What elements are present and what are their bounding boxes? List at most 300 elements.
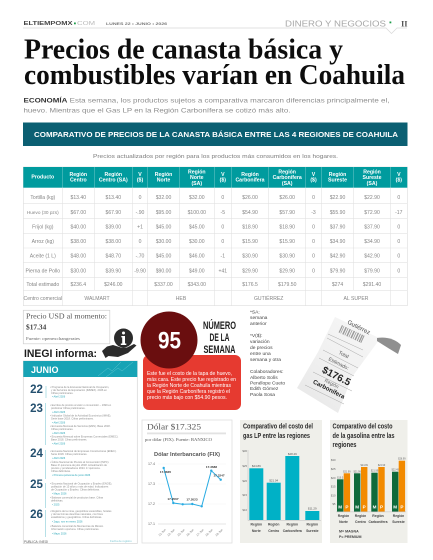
date 23: • Abril 2026 [52, 431, 66, 435]
line chart: 17.4 [148, 462, 155, 466]
red explanation box: que la Región Carbonífera registró el [147, 389, 230, 395]
line chart: 12-Jun [166, 528, 176, 537]
page header strip [23, 18, 408, 34]
bar chart: Región [268, 522, 279, 526]
notes and collaborators: semana [250, 316, 268, 321]
row: tortilla: 0 [312, 195, 315, 201]
row: huevo: $72.90 [364, 210, 380, 216]
bar chart: Norte [252, 529, 261, 533]
table header row: Centro [70, 178, 87, 184]
bar chart: Región [307, 522, 318, 526]
row: huevo: $100.00 [188, 210, 206, 216]
notes and collaborators: de precios [250, 345, 273, 351]
calendar header [23, 361, 137, 377]
row: tortilla: $32.00 [189, 195, 205, 201]
table header row: Región [363, 170, 381, 176]
panel: gas LP chart [240, 420, 322, 543]
date 23: • Indicador Global de la Actividad Económica (IMAE), [50, 414, 111, 418]
bar chart: $30 [242, 449, 247, 453]
date 23: • Escritos de precios al valor o consumidor – 1999 en [50, 403, 112, 407]
title: combustibles varían en Coahuila [24, 59, 405, 91]
line chart: 17.2067 [167, 497, 179, 501]
row: huevo: Huevo (30 pzs) [27, 210, 59, 215]
grouped bar chart: Región [393, 514, 404, 518]
row: frijol: $39.00 [106, 224, 121, 230]
date 26: • Mayo 2026 [52, 532, 67, 536]
page header strip: COM [77, 21, 96, 27]
row: tortilla: 0 [139, 195, 142, 201]
receipt illustration: Total [337, 350, 350, 360]
grouped bar chart: $25 [331, 467, 336, 471]
row: pierna de pollo [26, 268, 400, 274]
panel: USD price box: Fuente: openexchangerates [26, 337, 81, 341]
line chart: 11-Jun [158, 528, 167, 537]
date 23: • Encuesta Mensual sobre Empresas Comerciales (EMEC). [50, 434, 119, 438]
grouped bar chart: Centro [355, 520, 366, 524]
panel: gas LP chart: gas LP entre las regiones [243, 433, 310, 440]
date 22: • Abril 2026 [52, 394, 66, 398]
bar chart: $15 [242, 493, 247, 497]
grouped bar chart: M [393, 504, 397, 510]
date 23: • Abril 2026 [52, 442, 66, 446]
table header row: Región [155, 172, 172, 178]
date 24: 24 [30, 448, 43, 460]
price comparison table [23, 167, 407, 306]
grouped bar chart: M [373, 504, 377, 510]
line chart: 19-Jun [214, 528, 224, 537]
grouped bar chart: M [355, 504, 359, 510]
icon: hand holding info [102, 328, 136, 358]
table header row: Región [241, 172, 259, 178]
receipt illustration: Región [323, 378, 340, 390]
grouped bar chart: $21.99 [354, 470, 362, 473]
date 25: • Encuesta Nacional de Ocupación y Empleo (ENOE), [50, 482, 112, 486]
row: aceite: $42.90 [364, 254, 380, 260]
row: pierna de pollo: $79.90 [330, 268, 345, 274]
panel: USD price box [23, 310, 110, 344]
panel: USD price box: $17.34 [26, 322, 47, 332]
row: frijol: $18.90 [242, 224, 258, 230]
chart legend: P= PREMIUM [339, 535, 361, 539]
page header strip: LUNES 22 • JUNIO • 2026 [106, 22, 167, 26]
table header row: Norte [157, 178, 170, 184]
bar chart: $20 [242, 479, 247, 483]
row: arroz: 0 [312, 239, 315, 245]
line chart: 17-Jun [195, 528, 205, 537]
calendar footer [24, 539, 132, 544]
table header row: V [138, 172, 142, 178]
date 24: • Encuesta Nacional de Empresas Constructoras (ENEC). [50, 449, 117, 453]
row: arroz: Arroz (kg) [32, 239, 54, 245]
row: pierna de pollo: $39.90 [106, 268, 121, 274]
grouped bar chart: $19.5 [337, 476, 344, 479]
date 25: • Balanza comercial de productos base. Cifras [50, 496, 104, 500]
grouped bar chart: P [363, 504, 366, 510]
grouped bar chart: $22.49 [392, 469, 400, 472]
row: pierna de pollo: 0 [312, 268, 315, 274]
row: pierna de pollo: $49.00 [189, 268, 205, 274]
table header row: ($) [137, 178, 143, 184]
panel: dólar chart [142, 420, 232, 543]
row: huevo: -5 [221, 210, 225, 216]
row: frijol: 0 [221, 224, 224, 230]
date 22: • Programa de la Encuesta Nacional de Ocupación, [50, 385, 109, 389]
title: Precios de canasta básica y [24, 34, 343, 66]
banner heading [23, 122, 408, 146]
notes and collaborators: semana y otra [250, 357, 281, 363]
table header row: V [221, 172, 225, 178]
row: aceite: $48.70 [106, 254, 121, 260]
table header row: (SA) [282, 181, 293, 187]
grouped bar chart: $30 [331, 458, 336, 462]
grouped bar chart: M [338, 504, 342, 510]
row: arroz: 0 [139, 239, 142, 245]
date 24: • Primera quincena de junio 2026 [52, 473, 91, 477]
grouped bar chart: $21.99 [343, 470, 351, 473]
row: frijol [32, 224, 400, 230]
date 23: • Abril 2026 [52, 420, 66, 424]
table header row: V [397, 172, 401, 178]
red explanation box: Este fue el costo de la tapa de huevo, [147, 371, 232, 377]
notes and collaborators: *V($): [250, 333, 263, 339]
date 26: • Registro de la mina, geopolítica sostenibles, hoteles [50, 509, 112, 513]
line chart: 17.3688 [206, 465, 217, 469]
date 25: definitivas. [51, 498, 64, 502]
date 24: • Índice Nacional de Precios al Consumidor (INPC). [50, 460, 109, 464]
notes and collaborators: Alberto Solís [250, 375, 278, 381]
row: aceite: 0 [397, 254, 400, 260]
bar chart: Centro [268, 529, 279, 533]
panel: INEGI calendar [23, 361, 137, 544]
date 23: • Encuesta Mensual de Servicios (EMS). Base 2018. [50, 424, 111, 428]
row: frijol: $45.00 [189, 224, 205, 230]
grouped bar chart: P [345, 504, 348, 510]
row: pierna de pollo: $30.00 [71, 268, 86, 274]
row: aceite: $42.90 [330, 254, 345, 260]
table header row: ($) [396, 178, 402, 184]
notes and collaborators: *SA: [250, 310, 260, 316]
row: huevo: -.90 [136, 210, 145, 216]
page header strip: ELTIEMPOMX [24, 21, 73, 27]
bar chart: $10 [242, 508, 247, 512]
notes and collaborators: Colaboradores: [250, 369, 283, 375]
panel: gasolina chart [330, 420, 408, 543]
row: total estimado: $274 [332, 282, 343, 288]
row: tortilla [30, 195, 400, 201]
row: tortilla: $22.90 [330, 195, 345, 201]
date 24: Cifras definitivas. [51, 469, 71, 473]
date 24: Base 2ª quincena de julio 2018. Actualización de [51, 463, 107, 467]
date 26: • 2ago, nov en enero 2026 [52, 520, 83, 524]
panel: gasolina chart: de la gasolina entre las [332, 433, 395, 440]
table subtitle: Precios actualizados por región para los productos más consumidos en los hogares. [93, 154, 338, 160]
date 23 [30, 403, 119, 446]
bar chart: $28.49 [288, 452, 297, 456]
red explanation box: más cara. Este precio fue registrado en [147, 377, 236, 383]
row: huevo: $55.90 [330, 210, 345, 216]
row: tortilla: 0 [397, 195, 400, 201]
table header row: Región [278, 170, 296, 176]
line chart: 18-Jun [204, 528, 214, 537]
calendar footer: Fecha de registro [110, 539, 132, 543]
row: aceite: $45.00 [156, 254, 171, 260]
panel: gasolina chart: regiones [332, 442, 357, 449]
grouped bar chart: Región [338, 514, 349, 518]
row: frijol: +1 [137, 224, 143, 230]
row: aceite: -1 [221, 254, 225, 260]
row: frijol: $37.90 [364, 224, 380, 230]
row: tortilla: $13.40 [71, 195, 86, 201]
row: frijol: 0 [397, 224, 400, 230]
line chart: 17.2023 [186, 498, 198, 502]
date 25: 25 [30, 479, 43, 491]
panel: gasolina chart: Comparativo del costo [332, 424, 392, 430]
row: aceite [30, 254, 400, 260]
row: total estimado [26, 282, 381, 288]
line chart: 17.3835 [160, 470, 171, 474]
panel: gas LP chart: Comparativo del costo del [243, 424, 313, 430]
date 23: Base 2018. Cifras preliminares. [51, 438, 87, 442]
receipt illustration: Estimado: [327, 356, 350, 372]
receipt illustration [297, 317, 401, 413]
bar chart: Región [287, 522, 298, 526]
page header strip: II [401, 18, 408, 28]
grouped bar chart: $20 [331, 476, 336, 480]
date 23: preliminar Cifras preliminares. [51, 406, 86, 410]
date 24: Serie 2018. Cifras preliminares. [51, 452, 88, 456]
notes and collaborators: variación [250, 339, 270, 345]
intro text: ECONOMÍA Esta semana, los productos sujetos a comparativa marcaron diferencias principalmente el, [24, 96, 390, 104]
row: huevo: $57.90 [279, 210, 295, 216]
row: tortilla: $22.90 [364, 195, 380, 201]
row: tortilla: $26.00 [242, 195, 258, 201]
grouped bar chart: P [380, 504, 383, 510]
notes and collaborators: Paola Sosa [250, 392, 275, 398]
row: aceite: $30.90 [242, 254, 258, 260]
row: huevo: -3 [311, 210, 316, 216]
row: pierna de pollo: 0 [397, 268, 400, 274]
row: frijol: Frijol (kg) [32, 224, 54, 230]
date 26 [30, 509, 112, 536]
row: tortilla: $13.40 [106, 195, 121, 201]
row: arroz: 0 [397, 239, 400, 245]
bar chart: Región [251, 522, 262, 526]
line chart: 15-Jun [176, 528, 186, 537]
table header row: Producto [31, 174, 54, 180]
grouped bar chart: $24.99 [361, 464, 369, 467]
table header row: (SA) [367, 181, 378, 187]
bar chart [242, 449, 321, 533]
row: pierna de pollo: +41 [218, 268, 227, 274]
row: huevo: $95.00 [156, 210, 171, 216]
row: centro comercial: HEB [176, 296, 187, 302]
row: pierna de pollo: $90.00 [156, 268, 171, 274]
bar chart: $24.89 [252, 464, 261, 468]
date 26: Información oportuna. Cifras preliminares. [51, 527, 100, 531]
receipt illustration: $176.5 [320, 365, 353, 389]
date 23: 23 [30, 403, 43, 415]
row: arroz: $34.90 [364, 239, 380, 245]
title [24, 34, 405, 91]
panel: dólar chart: por dólar (FIX). Fuente: BANXICO [145, 437, 212, 442]
row: total estimado: $179.50 [278, 282, 297, 288]
row: aceite: $46.00 [189, 254, 205, 260]
grouped bar chart: Sureste [392, 520, 405, 524]
row: total estimado: Total estimado [26, 282, 59, 288]
notes and collaborators: entre una [250, 351, 271, 357]
notes and collaborators: Edith Gómez [250, 386, 279, 392]
date 22: Cifras preliminares. [51, 391, 74, 395]
row: pierna de pollo: -9.90 [134, 268, 146, 274]
row: arroz: $15.90 [242, 239, 258, 245]
page header strip: DINERO Y NEGOCIOS [285, 18, 386, 28]
bar chart: $11.29 [308, 506, 317, 510]
receipt illustration: Carbonífera [312, 379, 346, 401]
row: total estimado: $176.5 [242, 282, 258, 288]
row: aceite: -.70 [136, 254, 145, 260]
bar chart: Carbonífera [283, 529, 302, 533]
calendar header: JUNIO [31, 365, 59, 375]
table header row: Centro (SA) [99, 178, 128, 184]
table header row: Carbonífera [235, 178, 265, 184]
grouped bar chart: $10 [331, 494, 336, 498]
number circle: 95 [158, 328, 181, 354]
receipt illustration: Gutiérrez [346, 320, 371, 336]
number heading [203, 319, 236, 356]
number heading: SEMANA [204, 344, 236, 356]
row: huevo [27, 210, 403, 216]
line chart [148, 452, 226, 537]
grouped bar chart: $15 [331, 484, 336, 488]
row: arroz: $38.00 [71, 239, 86, 245]
red explanation box: precio más bajo con $54.90 pesos. [147, 395, 227, 401]
date 22: 22 [30, 384, 43, 396]
table header row: Región [329, 172, 346, 178]
row: centro comercial: Centro comercial [24, 296, 62, 302]
panel: número de la semana [140, 312, 241, 410]
row: total estimado: $291.40 [363, 282, 381, 288]
number heading: DE LA [210, 332, 230, 344]
date 24: precios y ponderadores 2024. 1ª quincena. [51, 466, 101, 470]
date 23: • Abril 2026 [52, 410, 66, 414]
grouped bar chart [331, 458, 406, 524]
row: aceite: 0 [312, 254, 315, 260]
date 24: • Abril 2026 [52, 456, 66, 460]
date 26: estadísticos y geográficos. Cifras definitivas. [51, 515, 102, 519]
line chart: Dólar Interbancario (FIX) [154, 452, 220, 458]
table header row: Sureste [362, 175, 382, 181]
row: total estimado: $343.00 [188, 282, 206, 288]
row: total estimado: $246.00 [104, 282, 123, 288]
grouped bar chart: Región [372, 514, 384, 518]
bar chart: $21.04 [269, 478, 279, 482]
row: tortilla: $32.00 [156, 195, 171, 201]
line chart: 17.3247 [213, 474, 225, 478]
row: centro comercial [24, 295, 369, 302]
date 24 [30, 448, 117, 477]
bar chart: $25 [242, 464, 247, 468]
row: arroz: 0 [221, 239, 224, 245]
number heading: NÚMERO [203, 319, 236, 332]
notes and collaborators [250, 310, 285, 398]
grouped bar chart: Región [355, 514, 366, 518]
date 22 [30, 384, 109, 398]
date 25: de Ocupación y Empleo. Cifras definitivas. [51, 488, 100, 492]
row: pierna de pollo: $29.90 [279, 268, 295, 274]
row: arroz: $34.90 [330, 239, 345, 245]
banner heading: COMPARATIVO DE PRECIOS DE LA CANASTA BÁSICA ENTRE LAS 4 REGIONES DE COAHUILA [34, 130, 399, 139]
date 25 [30, 479, 112, 506]
date 26: y de las formas descritas naturales, con fines [51, 512, 104, 516]
row: arroz [32, 239, 400, 245]
table header row: ($) [310, 178, 317, 184]
notes and collaborators: anterior [250, 321, 267, 327]
table header row: V [312, 172, 316, 178]
grouped bar chart: $5 [332, 502, 336, 506]
row: frijol: $18.90 [279, 224, 295, 230]
row: tortilla: 0 [221, 195, 224, 201]
row: total estimado: $337.00 [154, 282, 173, 288]
table header row: Sureste [328, 178, 347, 184]
row: arroz: $38.00 [106, 239, 121, 245]
row: centro comercial: GUTIÉRREZ [254, 295, 283, 302]
chart legend: M= MAGNA [339, 530, 359, 534]
red explanation box: la Región Norte de Coahuila mientras [147, 383, 231, 389]
row: aceite: Aceite (1 L) [30, 254, 56, 260]
line chart: 17.3 [148, 482, 155, 486]
date 26: 26 [30, 509, 43, 521]
row: aceite: $48.00 [71, 254, 86, 260]
table header row: Región [188, 170, 206, 176]
date 25: población de 15 años y más de edad. Indicadores [51, 484, 109, 488]
date 26: • Balanza comercial de Mercancías de México. [50, 524, 104, 528]
row: centro comercial: WALMART [84, 296, 110, 302]
row: pierna de pollo: $29.90 [242, 268, 258, 274]
calendar footer: PUBLICA: INEGI [24, 540, 48, 544]
row: huevo: $54.90 [242, 210, 258, 216]
line chart: 17.1 [148, 522, 155, 526]
row: huevo: -17 [395, 210, 403, 216]
table header row: Carbonífera [273, 175, 302, 181]
row: centro comercial: AL SUPER [343, 296, 369, 302]
row: frijol: $37.90 [330, 224, 345, 230]
row: frijol: $40.00 [71, 224, 86, 230]
table header row: (SA) [191, 181, 202, 187]
table header row: Región [70, 172, 87, 178]
heading: INEGI informa: INEGI informa: [24, 348, 97, 360]
table header row [31, 170, 402, 187]
bar chart: Sureste [306, 529, 319, 533]
table header row: ($) [220, 178, 226, 184]
row: huevo: $67.90 [106, 210, 121, 216]
row: tortilla: Tortilla (kg) [30, 195, 56, 201]
date 25: • 2025 [52, 502, 60, 506]
grouped bar chart: Carbonífera [368, 520, 388, 524]
date 25: • Mayo 2026 [52, 492, 67, 496]
grouped bar chart: $21.99 [371, 470, 379, 473]
table header row: Norte [190, 175, 204, 181]
row: arroz: $30.00 [156, 239, 171, 245]
date 22: y de Servicios de Exportación (IMMEX). 2026 en [51, 388, 107, 392]
row: frijol: $45.00 [156, 224, 171, 230]
grouped bar chart: P [400, 504, 403, 510]
grouped bar chart: $26.99 [398, 458, 406, 461]
line chart: 16-Jun [185, 528, 195, 537]
notes and collaborators: Penélope Cueto [250, 380, 285, 386]
date 23: Serie base 2018. Cifras preliminares. [51, 416, 94, 420]
panel: USD price box: Precio USD al momento: [26, 312, 107, 320]
intro text [24, 96, 390, 114]
